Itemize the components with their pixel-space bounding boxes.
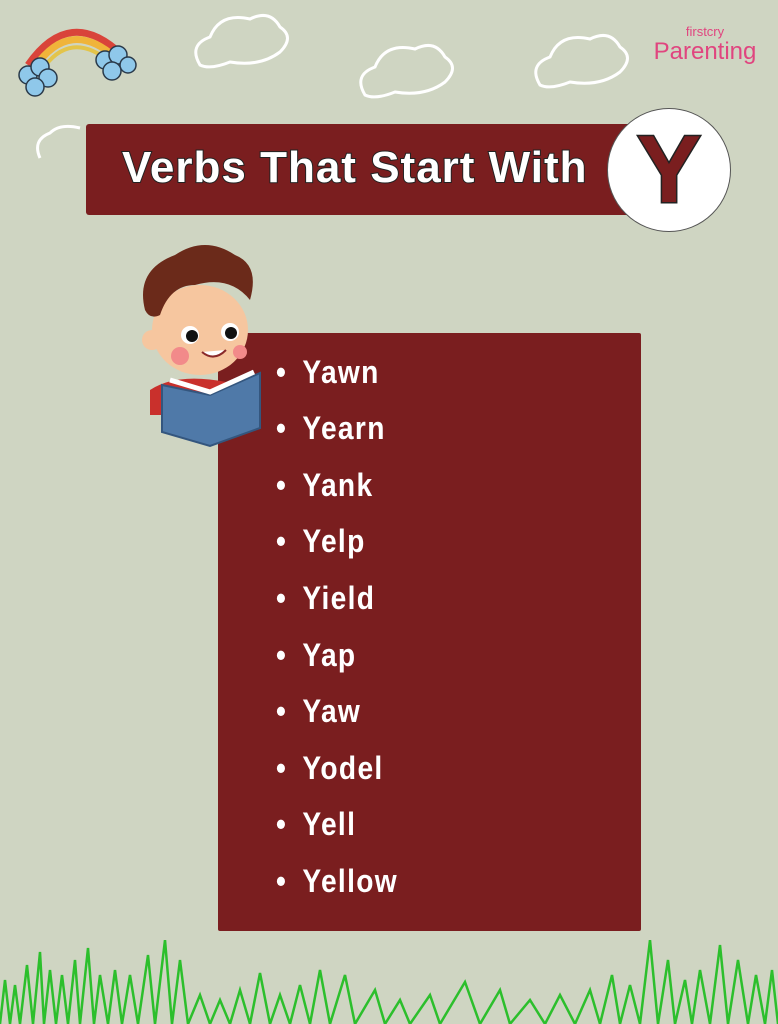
word list: • (276, 354, 287, 390)
illustration: boy reading book (142, 245, 261, 447)
logo (654, 24, 756, 65)
title banner (86, 124, 641, 215)
logo: Parenting (654, 38, 756, 65)
word list: • (276, 467, 287, 503)
word list: Yield (302, 580, 375, 616)
word list: • (276, 580, 287, 616)
title text: Verbs That Start With (122, 143, 588, 192)
word list: Yodel (302, 750, 384, 786)
word list: Yearn (302, 410, 386, 446)
word list: • (276, 806, 287, 842)
word list: • (276, 523, 287, 559)
word list: • (276, 637, 287, 673)
decorative clouds (36, 14, 629, 158)
word list: • (276, 410, 287, 446)
word list: • (276, 863, 287, 899)
word list: Yawn (302, 354, 380, 390)
word list: • (276, 750, 287, 786)
word list: Yank (302, 467, 373, 503)
grass (0, 940, 778, 1024)
word list: Yell (302, 806, 356, 842)
word list: • (276, 693, 287, 729)
letter circle (607, 108, 731, 232)
word list: Yap (302, 637, 356, 673)
word list panel (218, 333, 641, 931)
icon: rainbow (18, 28, 137, 97)
logo: firstcry (686, 24, 724, 39)
letter circle: Y (637, 116, 701, 223)
word list: Yaw (302, 693, 361, 729)
word list: Yellow (302, 863, 398, 899)
word list: Yelp (302, 523, 366, 559)
